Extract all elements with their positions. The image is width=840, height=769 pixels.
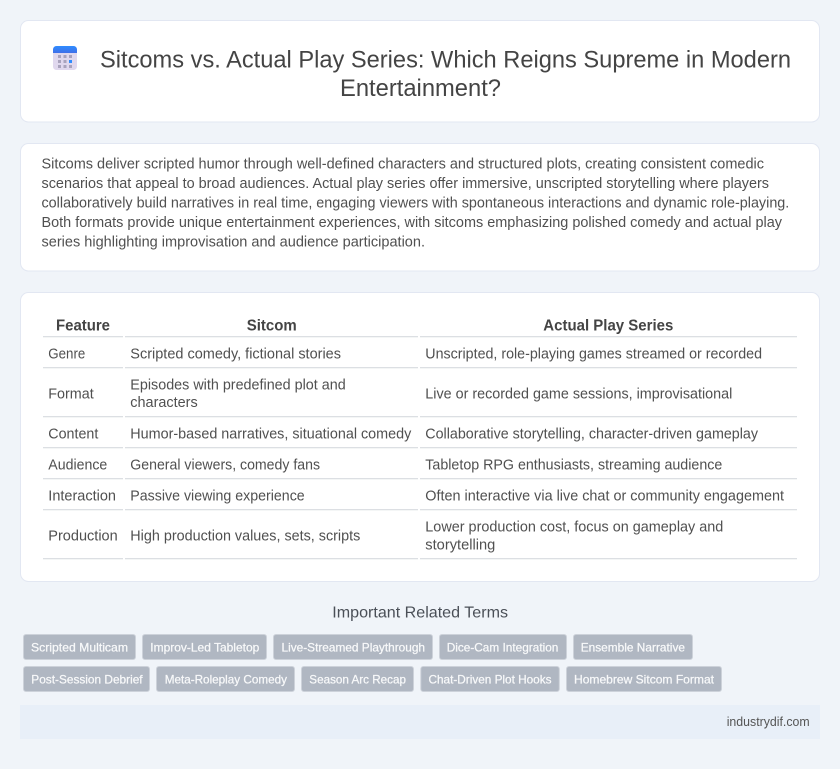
table header row: Feature: [56, 318, 110, 335]
tag: Season Arc Recap: Season Arc Recap: [309, 673, 406, 687]
row: genre: [43, 346, 797, 368]
row: production: [43, 519, 797, 559]
intro text: series highlighting improvisation and audience participation.: [42, 234, 425, 250]
row: content: Humor-based narratives, situational comedy: [130, 426, 412, 442]
tag: Ensemble Narrative: [574, 634, 692, 660]
intro text: scenarios that appeal to broad audiences. Actual play series offer immersive, unscripted storytelling where players: [42, 176, 769, 192]
tag: Chat-Driven Plot Hooks: Chat-Driven Plot Hooks: [428, 673, 552, 687]
row: production: Production: [48, 528, 118, 544]
row: format: characters: [130, 395, 198, 411]
row: content: Content: [48, 426, 98, 442]
row: interaction: [43, 488, 797, 510]
row: format: [43, 377, 797, 417]
row: audience: General viewers, comedy fans: [130, 457, 320, 473]
tag: Scripted Multicam: Scripted Multicam: [31, 641, 128, 655]
title: Entertainment?: [340, 75, 501, 102]
tag: Ensemble Narrative: Ensemble Narrative: [581, 641, 685, 655]
tag: Post-Session Debrief: [24, 666, 150, 692]
row: format: Live or recorded game sessions, improvisational: [425, 386, 732, 402]
row: production: storytelling: [425, 537, 495, 553]
footer: industrydif.com: [727, 714, 810, 729]
panel: comparison table: [20, 292, 820, 582]
tag: Live-Streamed Playthrough: Live-Streamed Playthrough: [282, 641, 425, 655]
row: audience: Tabletop RPG enthusiasts, streaming audience: [425, 457, 722, 473]
row: genre: Genre: [48, 346, 85, 362]
tag: Improv-Led Tabletop: [142, 634, 266, 660]
row: audience: Audience: [48, 457, 107, 473]
table header row: Sitcom: [247, 318, 297, 335]
row: production: Lower production cost, focus on gameplay and: [425, 519, 723, 535]
title: [100, 46, 791, 102]
table header row: Actual Play Series: [543, 318, 673, 335]
tag: Scripted Multicam: [24, 634, 136, 660]
tag: Homebrew Sitcom Format: Homebrew Sitcom Format: [574, 673, 715, 687]
icon: calendar: [53, 46, 77, 70]
tag: Improv-Led Tabletop: Improv-Led Tabletop: [150, 641, 260, 655]
title: Sitcoms vs. Actual Play Series: Which Reigns Supreme in Modern: [100, 46, 791, 74]
panel: header: [20, 20, 820, 122]
tag: Meta-Roleplay Comedy: [156, 666, 294, 692]
row: interaction: Often interactive via live chat or community engagement: [425, 488, 784, 504]
tag: Live-Streamed Playthrough: [274, 634, 432, 660]
tag group: related terms: [24, 634, 722, 692]
row: audience: [43, 457, 797, 479]
tag: Dice-Cam Integration: [440, 634, 566, 660]
row: format: Episodes with predefined plot and: [130, 377, 346, 393]
intro text: Both formats provide unique entertainment experiences, with sitcoms emphasizing polished comedy and actual play: [42, 215, 783, 231]
tag: Season Arc Recap: [302, 666, 414, 692]
tag: Homebrew Sitcom Format: [566, 666, 722, 692]
footer: [20, 705, 820, 739]
panel: introduction: [20, 144, 820, 271]
tag: Post-Session Debrief: Post-Session Debrief: [31, 673, 143, 687]
row: content: Collaborative storytelling, character-driven gameplay: [425, 426, 759, 442]
tag: Dice-Cam Integration: Dice-Cam Integration: [447, 641, 558, 655]
row: content: [43, 426, 797, 448]
row: interaction: Interaction: [48, 488, 116, 504]
row: format: Format: [48, 386, 94, 402]
heading: related terms: Important Related Terms: [332, 604, 508, 621]
row: production: High production values, sets, scripts: [130, 528, 360, 544]
row: genre: Scripted comedy, fictional stories: [130, 346, 341, 362]
intro text: collaboratively build narratives in real time, engaging viewers with spontaneous interactions and dynamic role-playing.: [42, 195, 789, 211]
tag: Meta-Roleplay Comedy: Meta-Roleplay Comedy: [165, 673, 287, 687]
intro text: Sitcoms deliver scripted humor through well-defined characters and structured plots, creating consistent comedic: [42, 156, 764, 172]
row: interaction: Passive viewing experience: [130, 488, 305, 504]
tag: Chat-Driven Plot Hooks: [421, 666, 559, 692]
table header row: [43, 318, 797, 337]
intro text: [42, 156, 789, 250]
row: genre: Unscripted, role-playing games streamed or recorded: [425, 346, 762, 362]
